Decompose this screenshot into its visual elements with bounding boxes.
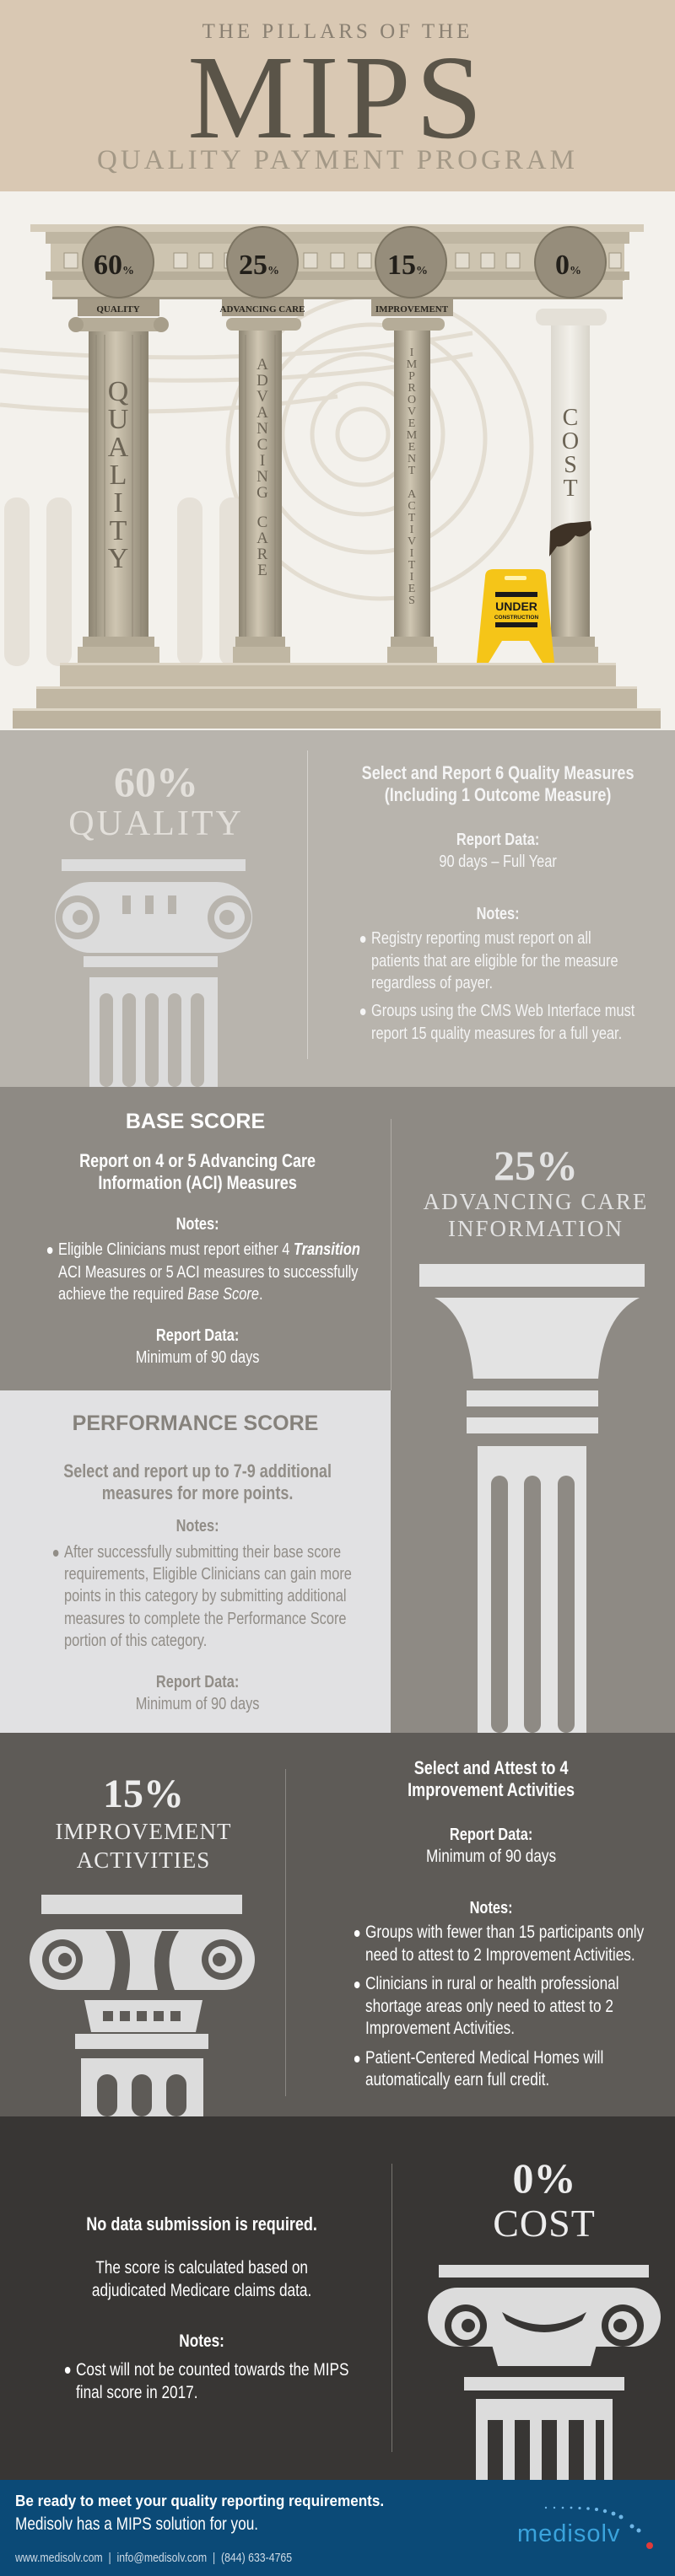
logo: medisolv: medisolv [517, 2520, 620, 2547]
sub-panel: base score: BASE SCORE [126, 1110, 265, 1133]
column lettering: O [408, 394, 416, 406]
bullets: improvement notes: Patient-Centered Medical Homes will automatically earn full credit. [365, 2047, 603, 2089]
column lettering: A [256, 404, 268, 422]
label boxes: ADVANCING CARE [220, 304, 305, 315]
text: quality requirements: 90 days – Full Year [439, 852, 557, 871]
sub-panel: base score: ACI Measures or 5 ACI measures to successfully achieve the required Base Score. [58, 1263, 358, 1304]
panel: cost [0, 2116, 675, 2480]
column lettering: C [257, 514, 267, 531]
heading: 25% advancing care information: ADVANCING CARE [424, 1189, 648, 1214]
column lettering: N [256, 420, 268, 438]
column: cost (broken) [536, 309, 607, 663]
text: cost requirements: adjudicated Medicare claims data. [92, 2281, 311, 2300]
column lettering: V [408, 406, 416, 418]
column lettering: L [110, 460, 127, 491]
panel: quality [0, 730, 675, 1087]
text: cost requirements: The score is calculated based on [95, 2258, 308, 2278]
column lettering: N [256, 468, 268, 486]
heading: 25% advancing care information: INFORMATION [448, 1216, 624, 1241]
column lettering: Y [108, 543, 128, 574]
heading: 60% quality [68, 758, 244, 843]
column: improvement [382, 318, 445, 663]
column: quality [68, 317, 169, 663]
column lettering: R [257, 546, 268, 563]
column lettering: D [256, 372, 268, 390]
column lettering: T [563, 476, 578, 502]
heading: 0% cost: 0% [513, 2154, 575, 2202]
column lettering: M [407, 429, 418, 442]
column lettering: P [408, 370, 415, 383]
bullets: improvement notes [354, 1923, 645, 2089]
icon: ionic pillar [55, 859, 252, 1087]
footer tagline: Be ready to meet your quality reporting requirements. [15, 2493, 384, 2509]
text: improvement requirements [408, 1757, 575, 1917]
subtitle: quality payment program: QUALITY PAYMENT PROGRAM [97, 145, 578, 175]
column lettering: G [256, 484, 268, 502]
column lettering: S [408, 594, 415, 607]
bullets: improvement notes: Clinicians in rural or health professional shortage areas only need to attest to 2 Improvement Activities. [365, 1974, 619, 2038]
icon: doric pillar [419, 1264, 645, 1733]
icon: ionic pillar [428, 2265, 661, 2480]
heading: 25% advancing care information [424, 1142, 648, 1241]
text: cost requirements [86, 2213, 317, 2351]
column lettering: I [113, 487, 123, 519]
column lettering: I [410, 347, 414, 359]
column lettering: I [410, 547, 414, 560]
sub-panel: performance score [0, 1390, 391, 1733]
temple illustration [0, 224, 661, 729]
percentage discs: 0% [555, 250, 581, 281]
column lettering: M [407, 358, 418, 371]
percentage discs: 15% [387, 250, 428, 281]
text: improvement requirements: Minimum of 90 days [426, 1847, 556, 1866]
heading: 60% quality: 60% [114, 758, 198, 805]
column lettering: T [408, 559, 416, 572]
text: cost requirements: Notes: [179, 2331, 224, 2351]
column lettering: A [108, 432, 129, 463]
column lettering: I [260, 452, 265, 470]
column lettering: C [408, 500, 416, 513]
bullets: quality notes: Registry reporting must report on all [371, 929, 591, 948]
percentage discs: 60% [94, 250, 134, 281]
panel: improvement activities [0, 1733, 675, 2116]
text: cost requirements: No data submission is required. [86, 2213, 317, 2235]
column lettering: R [408, 382, 416, 395]
column lettering: T [110, 515, 127, 546]
heading: 0% cost: COST [493, 2202, 596, 2245]
percentage discs: 25% [239, 250, 279, 281]
heading: 0% cost [493, 2154, 596, 2245]
column lettering: Q [108, 376, 128, 407]
label boxes [78, 299, 453, 316]
footer contact: www.medisolv.com | info@medisolv.com | (844) 633-4765 [15, 2551, 292, 2565]
column lettering: U [108, 404, 128, 435]
sub-panel: base score: Minimum of 90 days [136, 1348, 259, 1367]
label boxes: IMPROVEMENT [375, 304, 449, 315]
text: improvement requirements: Select and Attest to 4 [414, 1757, 568, 1778]
panel: advancing care information [0, 1087, 675, 1733]
column lettering: A [256, 530, 268, 547]
column lettering: N [408, 453, 416, 465]
header band [0, 0, 675, 191]
icon: under construction sign: CONSTRUCTION [494, 615, 538, 621]
column lettering: C [257, 436, 267, 454]
bullets: improvement notes: Groups with fewer than 15 participants only need to attest to 2 Improvement Activities. [365, 1923, 644, 1965]
bullets: quality notes: report 15 quality measures for a full year. [371, 1024, 622, 1043]
sub-panel: base score: Notes: [176, 1215, 219, 1234]
text: quality requirements: Select and Report 6 Quality Measures [362, 762, 634, 783]
footer [0, 2480, 675, 2576]
text: quality requirements: (Including 1 Outcome Measure) [385, 784, 611, 805]
percentage discs [83, 227, 606, 298]
bullets: quality notes: patients that are eligible for the measure [371, 952, 618, 971]
column lettering: E [257, 562, 267, 579]
column: advancing care [226, 318, 301, 663]
sub-panel: performance score: measures for more points. [102, 1482, 293, 1503]
column lettering: I [410, 524, 414, 536]
text: improvement requirements: Report Data: [450, 1826, 532, 1844]
sub-panel: performance score: Report Data: [156, 1673, 239, 1691]
bullets: quality notes: Groups using the CMS Web Interface must [371, 1002, 634, 1020]
column lettering: E [408, 417, 415, 430]
footer subline: Medisolv has a MIPS solution for you. [15, 2514, 258, 2534]
sub-panel: performance score: PERFORMANCE SCORE [73, 1412, 318, 1435]
subtitle: the pillars of the: THE PILLARS OF THE [202, 20, 472, 43]
heading: 15% improvement activities: ACTIVITIES [77, 1847, 210, 1873]
column lettering: T [408, 512, 416, 524]
sub-panel: performance score: Select and report up to 7-9 additional [63, 1460, 332, 1482]
column lettering: C [563, 405, 578, 431]
bullets: cost notes: Cost will not be counted towards the MIPS final score in 2017. [76, 2360, 349, 2402]
text: quality requirements: Notes: [477, 905, 520, 923]
sub-panel: base score [47, 1110, 360, 1367]
heading: 25% advancing care information: 25% [494, 1142, 578, 1189]
heading: 60% quality: QUALITY [68, 804, 244, 843]
logo: medisolv [517, 2506, 653, 2549]
column lettering: I [410, 571, 414, 583]
sub-panel: performance score: After successfully submitting their base score requirements, Eligible Clinicians can gain more points in this category by submitting additional measures to complete the Performance Score portion of this category. [64, 1543, 352, 1650]
entablature [30, 224, 644, 299]
icon: ornate pillar [30, 1895, 255, 2116]
column lettering: V [256, 388, 268, 406]
column lettering: T [408, 465, 416, 477]
column lettering: O [562, 428, 579, 454]
column lettering: A [408, 488, 417, 501]
text: quality requirements [362, 762, 634, 923]
sub-panel: performance score: Minimum of 90 days [136, 1695, 259, 1713]
sub-panel: base score: Report on 4 or 5 Advancing Care [79, 1150, 316, 1171]
label boxes: QUALITY [96, 304, 140, 315]
text: improvement requirements: Notes: [470, 1899, 513, 1917]
column lettering [108, 347, 579, 607]
steps [13, 663, 661, 729]
text: improvement requirements: Improvement Activities [408, 1779, 575, 1800]
column lettering: A [256, 356, 268, 374]
column lettering: E [408, 583, 415, 595]
sub-panel: base score: Report Data: [156, 1326, 239, 1345]
icon: under construction sign [477, 569, 554, 663]
heading: 15% improvement activities: 15% [103, 1772, 184, 1816]
heading: 15% improvement activities: IMPROVEMENT [55, 1819, 231, 1844]
text: quality requirements: Report Data: [456, 831, 539, 849]
icon: under construction sign: UNDER [495, 600, 537, 613]
column lettering: V [408, 535, 416, 548]
column lettering: S [564, 452, 577, 478]
column lettering: E [408, 441, 415, 454]
sub-panel: performance score: Notes: [176, 1517, 219, 1535]
heading: 15% improvement activities [55, 1772, 231, 1873]
sub-panel: base score: Eligible Clinicians must report either 4 Transition [58, 1240, 360, 1259]
title: MIPS: MIPS [187, 30, 488, 164]
bullets: quality notes: regardless of payer. [371, 974, 493, 992]
sub-panel: base score: Information (ACI) Measures [98, 1172, 297, 1193]
bullets: quality notes [359, 929, 634, 1043]
